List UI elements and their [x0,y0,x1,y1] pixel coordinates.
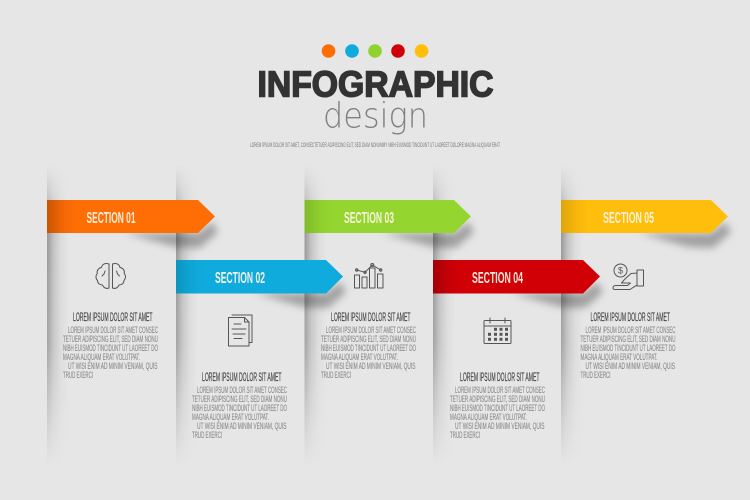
text block: section 04: TRUD EXERCI [450,430,480,440]
arrow: section 02 [176,260,343,294]
infographic canvas: LOREM IPSUM DOLOR SIT AMET [331,310,411,324]
text block: section 02: MAGNA ALIQUAM ERAT VOLUTPAT. [192,412,269,422]
panel edge shadows [47,165,583,465]
text block: section 03: UT WISI ENIM AD MINIM VENIAM, QUIS [326,361,416,371]
arrow shadows [125,222,731,308]
text block: section 04: UT WISI ENIM AD MINIM VENIAM, QUIS [455,421,544,431]
text block: section 01: MAGNA ALIQUAM ERAT VOLUTPAT. [63,352,140,362]
icon: documents [228,315,252,346]
text block: section 02 [192,370,287,440]
arrow: section 02: SECTION 02 [215,270,265,287]
text block: section 03: TRUD EXERCI [321,370,351,380]
subtitle: design: design [323,96,428,136]
infographic canvas [47,44,734,450]
icon: hand with coin [613,264,644,290]
infographic canvas: LOREM IPSUM DOLOR SIT AMET [73,310,153,324]
arrow: section 01: SECTION 01 [86,210,136,227]
text block: section 01: UT WISI ENIM AD MINIM VENIAM, QUIS [68,361,158,371]
arrow: section 05: SECTION 05 [603,210,654,227]
text block: section 05 [580,310,676,380]
arrow: section 01 [47,200,215,233]
text block: section 05: MAGNA ALIQUAM ERAT VOLUTPAT. [580,352,658,362]
infographic canvas: LOREM IPSUM DOLOR SIT AMET CONSEC [197,385,287,395]
text block: section 01: TRUD EXERCI [63,370,93,380]
infographic canvas: LOREM IPSUM DOLOR SIT AMET CONSEC [455,385,545,395]
infographic canvas: NIBH EUISMOD TINCIDUNT UT LAOREET DO [321,343,416,353]
icon: bar chart [354,264,383,288]
infographic canvas: LOREM IPSUM DOLOR SIT AMET CONSEC [68,325,158,335]
arrow: section 03: SECTION 03 [344,210,394,227]
tagline: LOREM IPSUM DOLOR SIT AMET, CONSECTETUER ADIPISCING ELIT, SED DIAM NONUMMY NIBH EUISMOD TINCIDUNT UT LAOREET DOLORE MAGNA ALIQUAM ERAT [250,143,500,149]
infographic canvas: LOREM IPSUM DOLOR SIT AMET CONSEC [326,325,416,335]
arrow: section 03 [304,200,471,233]
color dots [322,44,428,58]
text block: section 05: UT WISI ENIM AD MINIM VENIAM, QUIS [586,361,675,371]
infographic canvas: LOREM IPSUM DOLOR SIT AMET [460,370,540,384]
icon: calendar [484,318,511,344]
text block: section 04 [450,370,545,440]
title: INFOGRAPHIC [258,64,494,104]
infographic canvas: NIBH EUISMOD TINCIDUNT UT LAOREET DO [192,403,287,413]
icon: hand with coin: $ [618,266,623,276]
text block: section 05: TRUD EXERCI [580,370,610,380]
text block: section 03 [321,310,416,380]
text block: section 03: TETUER ADIPISCING ELIT, SED DIAM NONU [321,334,416,344]
text block: section 04: TETUER ADIPISCING ELIT, SED DIAM NONU [450,394,545,404]
arrow: section 04: SECTION 04 [472,270,523,287]
icon: brain [96,263,126,288]
arrow: section 05 [561,200,728,233]
text block: section 04: MAGNA ALIQUAM ERAT VOLUTPAT. [450,412,527,422]
text block: section 01: TETUER ADIPISCING ELIT, SED DIAM NONU [63,334,158,344]
text block: section 02: UT WISI ENIM AD MINIM VENIAM, QUIS [197,421,286,431]
infographic canvas: LOREM IPSUM DOLOR SIT AMET [202,370,282,384]
text block: section 02: TRUD EXERCI [192,430,222,440]
text block: section 03: MAGNA ALIQUAM ERAT VOLUTPAT. [321,352,398,362]
infographic canvas: NIBH EUISMOD TINCIDUNT UT LAOREET DO [63,343,158,353]
infographic canvas: NIBH EUISMOD TINCIDUNT UT LAOREET DO [450,403,545,413]
text block: section 02: TETUER ADIPISCING ELIT, SED DIAM NONU [192,394,287,404]
arrow: section 04 [433,260,600,294]
text block: section 01 [63,310,158,380]
